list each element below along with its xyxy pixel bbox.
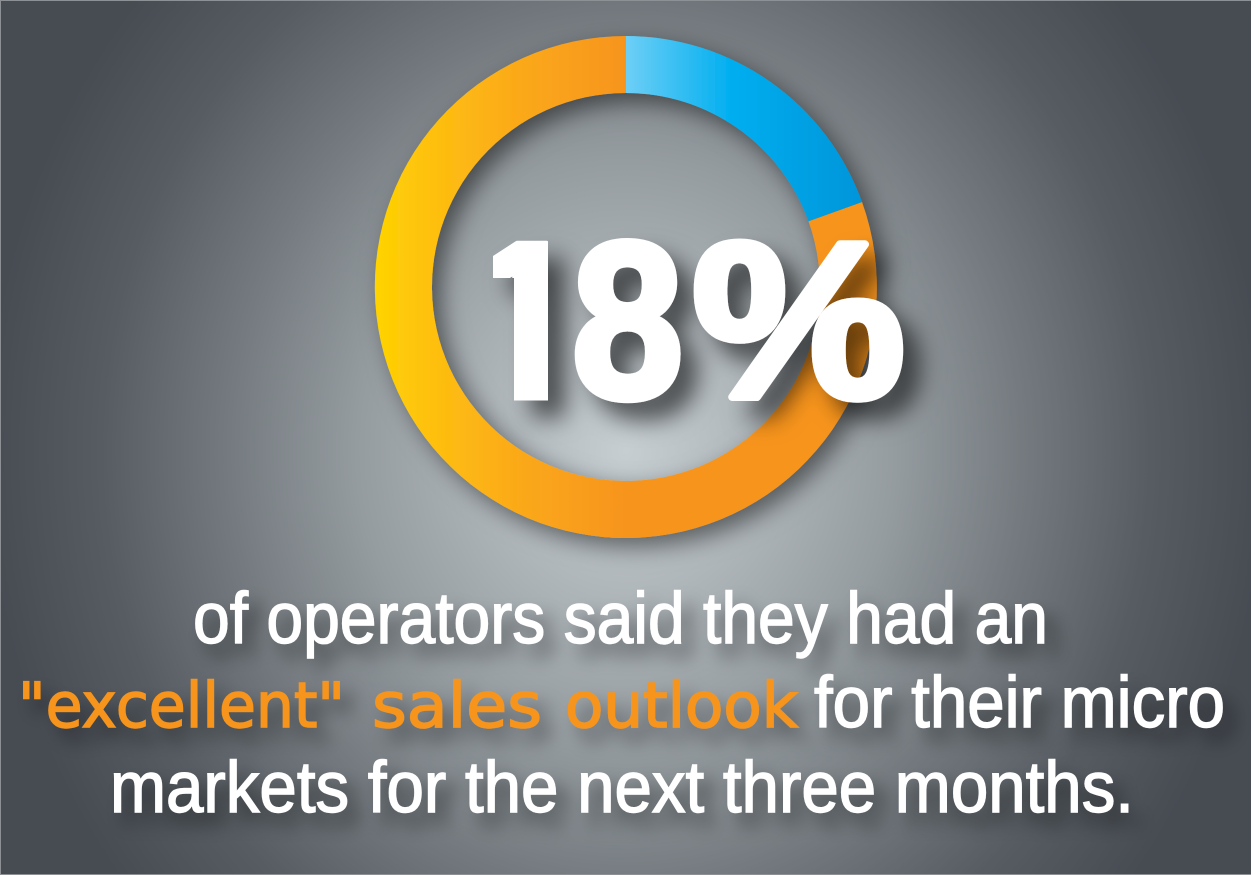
caption line 2 remainder: for their micro xyxy=(814,663,1225,743)
donut chart xyxy=(375,36,877,538)
big number 18%: 1 xyxy=(464,197,587,445)
caption line 2 highlighted phrase xyxy=(18,669,798,742)
big number 18%: % xyxy=(692,196,905,444)
caption line 1: of operators said they had an xyxy=(193,579,1048,659)
caption line 3: markets for the next three months. xyxy=(110,748,1134,828)
orange segment xyxy=(375,36,877,538)
caption line 2 highlighted phrase: "excellent" xyxy=(18,669,345,742)
caption text xyxy=(18,579,1225,828)
caption line 2 highlighted phrase: outlook xyxy=(565,669,798,742)
big number 18% xyxy=(493,238,934,436)
blue segment xyxy=(626,36,862,221)
big number 18%: 8 xyxy=(572,196,683,444)
caption line 2 highlighted phrase: sales xyxy=(372,669,542,742)
